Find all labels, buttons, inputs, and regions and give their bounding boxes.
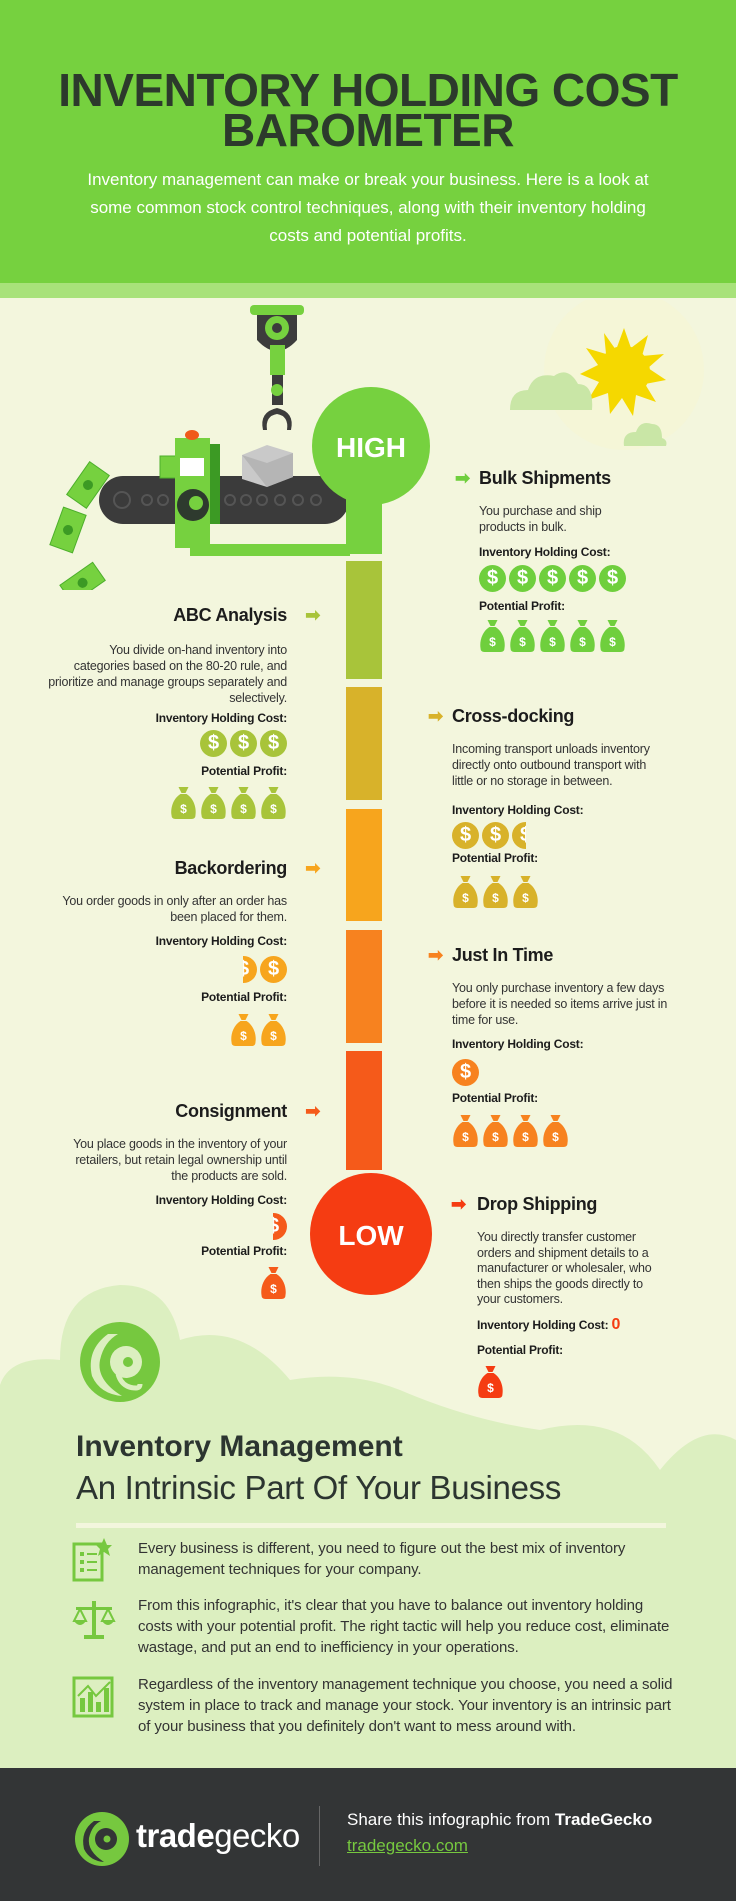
section: Drop Shipping: You directly transfer customer (477, 1230, 636, 1244)
subtitle: Inventory management can make or break your business. Here is a look at (87, 170, 649, 189)
section: Backordering (62, 858, 320, 1046)
section: Cross-docking: $ (490, 824, 501, 846)
section: ABC Analysis: $ (238, 732, 249, 754)
icon: chart (72, 1676, 114, 1718)
point 3 (72, 1676, 672, 1735)
section: Consignment: Consignment (175, 1101, 287, 1121)
section: ABC Analysis: $ (270, 802, 277, 816)
section: Bulk Shipments: $ (549, 635, 556, 649)
section: Bulk Shipments: You purchase and ship (479, 504, 602, 518)
section: Backordering: $ (270, 1029, 277, 1043)
heading: Inventory Management: Inventory Management (76, 1430, 403, 1463)
section: Bulk Shipments: $ (579, 635, 586, 649)
lower cloud background (0, 1285, 736, 1768)
belt (99, 476, 349, 524)
header band (0, 0, 736, 298)
section: Backordering: $ (268, 958, 279, 980)
gauge segments (346, 561, 382, 1170)
section: Just In Time: $ (462, 1130, 469, 1144)
section: ABC Analysis: You divide on-hand inventory into (109, 643, 287, 657)
point 3: Regardless of the inventory management technique you choose, you need a solid (138, 1676, 672, 1693)
section: Cross-docking: little or no storage in between. (452, 774, 612, 788)
section: ABC Analysis: $ (268, 732, 279, 754)
point 1 (72, 1538, 626, 1582)
section: Just In Time: You only purchase inventory a few days (452, 981, 664, 995)
footer logo: tradegecko (136, 1817, 300, 1854)
machine (175, 438, 210, 548)
barometer (310, 387, 432, 1295)
section: ABC Analysis: Inventory Holding Cost: (156, 711, 287, 725)
section: Backordering: ➡ (305, 858, 320, 878)
section: Backordering: $ (240, 1029, 247, 1043)
section: Cross-docking (428, 706, 650, 908)
section: ABC Analysis: $ (240, 802, 247, 816)
section: Cross-docking: ➡ (428, 706, 443, 726)
section: Drop Shipping: your customers. (477, 1292, 563, 1306)
section: Just In Time: before it is needed so items arrive just in (452, 997, 667, 1011)
high bulb (312, 387, 430, 554)
point 2: wastage, and put an end to inefficiency in your operations. (138, 1639, 519, 1656)
section: Bulk Shipments: Bulk Shipments (479, 468, 611, 488)
section: Bulk Shipments: Potential Profit: (479, 599, 565, 613)
section: Backordering: been placed for them. (170, 910, 287, 924)
section: Cross-docking: $ (492, 891, 499, 905)
section: Consignment: the products are sold. (171, 1169, 287, 1183)
footer share text: tradegecko.com (347, 1836, 468, 1855)
section: Bulk Shipments: $ (517, 567, 528, 589)
section: Backordering: Inventory Holding Cost: (156, 934, 287, 948)
section: Drop Shipping: Drop Shipping (477, 1194, 597, 1214)
section: Consignment: Potential Profit: (201, 1244, 287, 1258)
section: Drop Shipping: Potential Profit: (477, 1343, 563, 1357)
section: Consignment: ➡ (305, 1101, 320, 1121)
subheading: An Intrinsic Part Of Your Business (76, 1469, 561, 1506)
section: Just In Time: Inventory Holding Cost: (452, 1037, 583, 1051)
section: Drop Shipping: Inventory Holding Cost: 0 (477, 1316, 620, 1333)
section: Bulk Shipments: $ (547, 567, 558, 589)
icon: scales (72, 1601, 116, 1639)
box (242, 445, 293, 487)
footer share text: Share this infographic from TradeGecko (347, 1810, 652, 1829)
section: Bulk Shipments: Inventory Holding Cost: (479, 545, 610, 559)
point 1: management techniques for your company. (138, 1561, 421, 1578)
title (58, 64, 678, 156)
section: Just In Time: Just In Time (452, 945, 553, 965)
point 2 (72, 1597, 669, 1656)
section: Cross-docking: Incoming transport unloads inventory (452, 742, 650, 756)
point 1: Every business is different, you need to figure out the best mix of inventory (138, 1540, 625, 1557)
section: Just In Time: Potential Profit: (452, 1091, 538, 1105)
section: ABC Analysis: categories based on the 80-20 rule, and (74, 659, 287, 673)
robot arm (250, 305, 304, 430)
section: Bulk Shipments: ➡ (455, 468, 470, 488)
section: ABC Analysis: $ (208, 732, 219, 754)
section: Cross-docking: $ (462, 891, 469, 905)
section: Drop Shipping: manufacturer or wholesaler, who (477, 1261, 651, 1275)
section: Drop Shipping (451, 1194, 652, 1398)
point 2: From this infographic, it's clear that you have to balance out inventory holding (138, 1597, 643, 1614)
section: Cross-docking: $ (522, 891, 529, 905)
section: Bulk Shipments: $ (607, 567, 618, 589)
section: Consignment (73, 1101, 320, 1299)
section: Consignment: Inventory Holding Cost: (156, 1193, 287, 1207)
section: Drop Shipping: orders and shipment details to a (477, 1246, 648, 1260)
section: Just In Time: $ (460, 1061, 471, 1083)
section: Bulk Shipments: $ (489, 635, 496, 649)
section: Bulk Shipments (455, 468, 626, 652)
section: ABC Analysis: ABC Analysis (173, 605, 287, 625)
section: Backordering: Backordering (175, 858, 287, 878)
section: Just In Time: ➡ (428, 945, 443, 965)
title: INVENTORY HOLDING COST (58, 64, 678, 116)
icon: checklist (72, 1538, 112, 1582)
section: Consignment: $ (270, 1282, 277, 1296)
section: Just In Time: time for use. (452, 1013, 518, 1027)
section: Bulk Shipments: $ (609, 635, 616, 649)
section: ABC Analysis: Potential Profit: (201, 764, 287, 778)
section: Backordering: You order goods in only after an order has (62, 894, 287, 908)
section: Drop Shipping: ➡ (451, 1194, 466, 1214)
section: Cross-docking: Potential Profit: (452, 851, 538, 865)
low bulb: LOW (338, 1220, 404, 1251)
point 2: costs with your potential profit. The right tactic will help you reduce cost, eliminate (138, 1618, 669, 1635)
illustration: conveyor machine (49, 305, 350, 590)
section: Cross-docking: directly onto outbound transport with (452, 758, 646, 772)
subtitle: costs and potential profits. (269, 226, 467, 245)
section: Bulk Shipments: $ (577, 567, 588, 589)
section: Bulk Shipments: $ (519, 635, 526, 649)
title: BAROMETER (222, 104, 514, 156)
section: Cross-docking: $ (460, 824, 471, 846)
section: Cross-docking: Cross-docking (452, 706, 574, 726)
section: Consignment: You place goods in the inventory of your (73, 1137, 287, 1151)
high bulb: HIGH (336, 432, 406, 463)
icon: gecko logo (80, 1322, 160, 1402)
section: Consignment: retailers, but retain legal ownership until (75, 1153, 287, 1167)
point 3: system in place to track and manage your stock. Your inventory is an intrinsic part (138, 1697, 671, 1714)
section: ABC Analysis (48, 605, 320, 819)
section: Cross-docking: Inventory Holding Cost: (452, 803, 583, 817)
sun and clouds (510, 328, 666, 446)
section: ABC Analysis: prioritize and manage groups separately and (48, 675, 287, 689)
low bulb (310, 1173, 432, 1295)
section: ABC Analysis: selectively. (229, 691, 287, 705)
text: of your business that you definitely don't want to mess around with. (138, 1718, 576, 1735)
section: ABC Analysis: ➡ (305, 605, 320, 625)
footer logo (75, 1812, 300, 1866)
section: Just In Time (428, 945, 667, 1147)
bills (160, 456, 200, 478)
section: ABC Analysis: $ (180, 802, 187, 816)
section: Just In Time: $ (492, 1130, 499, 1144)
footer share text (347, 1810, 652, 1855)
section: Just In Time: $ (522, 1130, 529, 1144)
section: Just In Time: $ (552, 1130, 559, 1144)
section: Drop Shipping: $ (487, 1381, 494, 1395)
footer (0, 1768, 736, 1901)
section: Bulk Shipments: $ (487, 567, 498, 589)
section: Drop Shipping: then ships the goods directly to (477, 1276, 643, 1290)
section: ABC Analysis: $ (210, 802, 217, 816)
section: Bulk Shipments: products in bulk. (479, 520, 567, 534)
subtitle (87, 170, 649, 245)
section: Backordering: Potential Profit: (201, 990, 287, 1004)
subtitle: some common stock control techniques, along with their inventory holding (90, 198, 646, 217)
